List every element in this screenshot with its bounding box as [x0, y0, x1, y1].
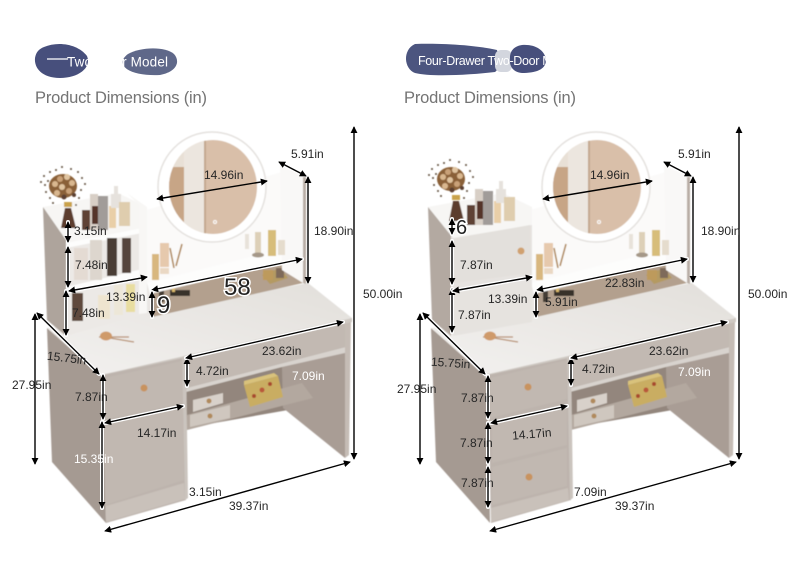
dimension: left 15.75in: 15.75in	[46, 349, 87, 367]
dimension: right mirror 14.96in: 14.96in	[590, 168, 629, 182]
dimension: right overall height 50.00in: 50.00in	[748, 287, 787, 301]
dimension: left depth 5.91in: 5.91in	[291, 147, 324, 161]
dimension: left 18.90in	[308, 177, 353, 283]
dimension: left 15.35in	[74, 422, 113, 508]
dimension: right 13.39in	[453, 277, 532, 306]
dimension: left width 39.37in: 39.37in	[229, 499, 268, 513]
dimension: left mirror 14.96in: 14.96in	[204, 168, 243, 182]
dimension: left 23.62in	[186, 322, 343, 358]
pill: four-drawer two-door model	[406, 44, 575, 75]
dimension: right hutch 7.87in upper	[452, 241, 493, 284]
dimension: left shelf width 58: 58	[224, 274, 251, 301]
dimension: left 7.48in lower: 7.48in	[72, 306, 105, 320]
furniture: right vanity desk	[428, 132, 736, 523]
dimension: left 7.48in upper: 7.48in	[75, 258, 108, 272]
dimension: right shelf width 22.83in	[537, 259, 687, 290]
dimension: left depth 5.91in	[279, 147, 324, 176]
dimension: right depth 5.91in: 5.91in	[678, 147, 711, 161]
dimension: left 4.72in	[187, 358, 229, 386]
dimension: right 7.09in base: 7.09in	[574, 485, 607, 499]
furniture: left vanity desk	[40, 132, 352, 523]
dimension: left 7.48in upper	[68, 247, 108, 287]
dimension: left 7.87in: 7.87in	[75, 390, 108, 404]
dimension: right mirror 14.96in	[543, 168, 652, 199]
dimension: right 23.62in: 23.62in	[649, 344, 688, 358]
dimension: right hutch 7.87in upper: 7.87in	[460, 258, 493, 272]
heading: right dimensions: Product Dimensions (in)	[404, 89, 576, 107]
dimension: right drawer 7.87in bottom	[461, 467, 494, 507]
dimension: right 18.90in: 18.90in	[701, 224, 740, 238]
dimension: right 18.90in	[693, 177, 740, 282]
dimension: right 27.95in: 27.95in	[397, 382, 436, 396]
dimension: right drawer 7.87in top: 7.87in	[461, 391, 494, 405]
pill: two-door model: Two-Door Model	[67, 54, 168, 70]
dimension: left 14.17in	[105, 406, 183, 440]
dimension: right 14.17in: 14.17in	[512, 425, 552, 443]
dimension: left width 39.37in	[105, 462, 350, 531]
dimension: right 23.62in	[571, 322, 727, 358]
dimension: left 27.95in: 27.95in	[12, 378, 51, 392]
dimension: left 13.39in	[69, 277, 147, 304]
dimension: right drawer 7.87in middle: 7.87in	[460, 436, 493, 450]
dimension: left shelf width 58	[152, 259, 302, 301]
dimension: right drawer 7.87in top	[461, 376, 494, 418]
dimension: right depth 5.91in	[664, 147, 711, 176]
dimension: left 15.35in: 15.35in	[74, 452, 113, 466]
dimension: left 3.15in	[68, 222, 107, 242]
dimension: left 14.17in: 14.17in	[137, 426, 176, 440]
dimension: right 14.17in	[491, 406, 567, 443]
dimension: left overall height 50.00in: 50.00in	[363, 287, 402, 301]
dimension: left 18.90in: 18.90in	[314, 224, 353, 238]
dimension: left 7.48in lower	[66, 291, 105, 335]
dimension: right shelf clearance 5.91in	[536, 292, 578, 317]
dimension: right width 39.37in: 39.37in	[615, 499, 654, 513]
dimension: right top gap 6: 6	[456, 217, 467, 239]
heading: left dimensions: Product Dimensions (in)	[35, 89, 207, 107]
dimension: right 7.09in: 7.09in	[678, 365, 711, 379]
dimension: right hutch 7.87in lower: 7.87in	[458, 308, 491, 322]
dimension: left mirror 14.96in	[157, 168, 267, 199]
dimension: left 4.72in: 4.72in	[196, 364, 229, 378]
pill: two-door model	[35, 44, 177, 78]
dimension: right shelf clearance 5.91in: 5.91in	[545, 295, 578, 309]
pill: four-drawer two-door model: Four-Drawer Two-Door Model	[418, 54, 575, 68]
dimension: left 3.15in base: 3.15in	[189, 485, 222, 499]
dimension: right width 39.37in	[490, 462, 736, 531]
dimension: right hutch 7.87in lower	[452, 289, 491, 332]
dimension: left 15.75in	[37, 313, 99, 374]
dimension: right drawer 7.87in middle	[460, 423, 493, 463]
dimension: right 13.39in: 13.39in	[488, 292, 527, 306]
dimension: right 15.75in	[423, 313, 485, 374]
dimension: left 7.09in: 7.09in	[292, 369, 325, 383]
dimension: right 4.72in	[571, 358, 615, 385]
dimension: left 13.39in: 13.39in	[106, 290, 145, 304]
dimension: left 3.15in: 3.15in	[74, 224, 107, 238]
dimension: right 4.72in: 4.72in	[582, 362, 615, 376]
dimension: left 23.62in: 23.62in	[262, 344, 301, 358]
dimension: right 15.75in: 15.75in	[431, 355, 471, 371]
dimension: right shelf width 22.83in: 22.83in	[605, 276, 644, 290]
dimension: right drawer 7.87in bottom: 7.87in	[461, 476, 494, 490]
dimension: left shelf clearance 9: 9	[157, 292, 170, 319]
dimension: left 7.87in	[75, 375, 108, 419]
